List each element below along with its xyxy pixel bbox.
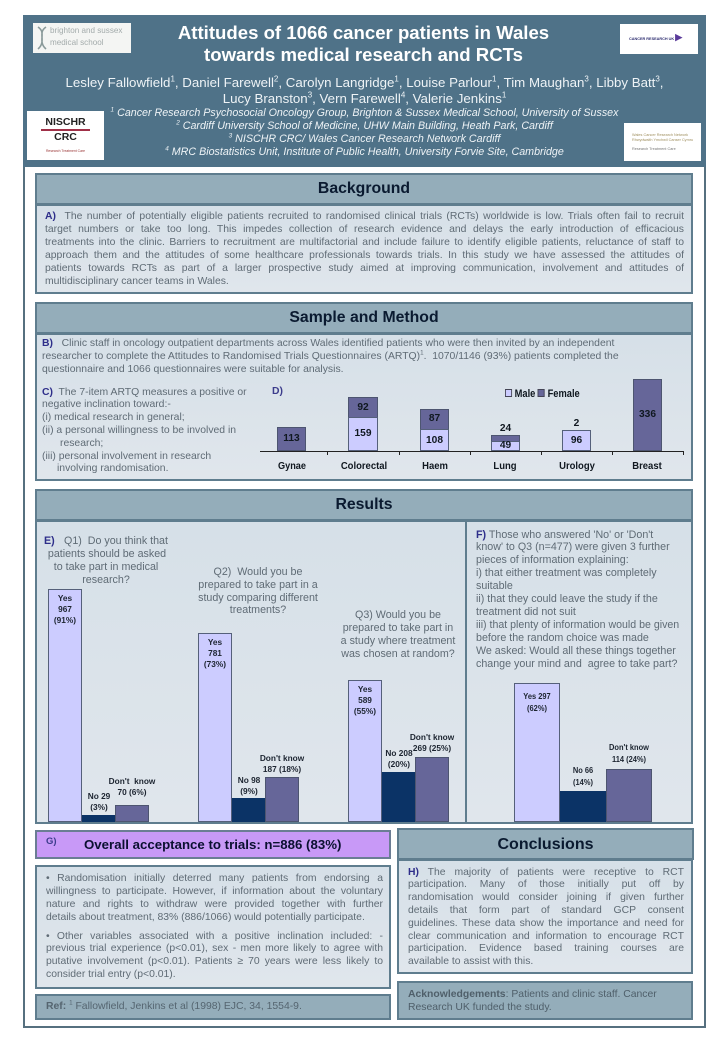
value labels: 967 bbox=[58, 604, 72, 614]
chart D: patients by cancer site: 96 bbox=[571, 435, 582, 446]
question 1: Q1) Do you think that bbox=[64, 535, 168, 547]
chart D: patients by cancer site: 24 bbox=[500, 423, 511, 434]
value labels: 589 bbox=[358, 695, 372, 705]
question 3 bbox=[341, 608, 456, 660]
chart D: patients by cancer site: 159 bbox=[354, 428, 372, 439]
label G: G) bbox=[46, 836, 57, 847]
bars: 113 bbox=[283, 433, 300, 444]
panel: acknowledgements: Acknowledgements: Patients and clinic staff. Cancer bbox=[408, 989, 657, 1000]
chart D: patients by cancer site: Haem bbox=[422, 461, 448, 472]
value labels: (62%) bbox=[527, 702, 547, 712]
text F bbox=[476, 528, 679, 670]
logo: Brighton and Sussex: medical school bbox=[50, 38, 104, 47]
text C: C) The 7-item ARTQ measures a positive or bbox=[42, 386, 247, 398]
text B: researcher to complete the Attitudes to Randomised Trials Questionnaires (ARTQ)1. 1070/1146 (93%) patients completed the bbox=[42, 349, 619, 362]
text F: know' to Q3 (n=477) were given 3 further bbox=[476, 541, 670, 553]
panel: results right bbox=[465, 520, 693, 824]
panel: results summary text: • Randomisation initially deterred many patients from endorsing a bbox=[46, 873, 383, 884]
panel: conclusions heading: Conclusions bbox=[497, 836, 594, 853]
panel: background heading bbox=[35, 173, 693, 205]
affiliations: 3 NISCHR CRC/ Wales Cancer Research Network Cardiff bbox=[229, 132, 500, 145]
question 1: E) bbox=[44, 535, 55, 547]
legend: Male Female bbox=[515, 388, 580, 400]
bars bbox=[48, 589, 82, 822]
panel: conclusions text: H) The majority of patients were receptive to RCT bbox=[408, 866, 684, 878]
question 2 bbox=[198, 566, 318, 616]
question 3: prepared to take part in bbox=[343, 622, 453, 634]
question 1: to take part in medical bbox=[54, 560, 158, 572]
question 3: a study where treatment bbox=[341, 634, 455, 646]
text F: F) Those who answered 'No' or 'Don't bbox=[476, 528, 653, 540]
panel: conclusions text: clear communication and information to encourage RCT bbox=[408, 930, 684, 942]
value labels bbox=[523, 691, 551, 712]
panel: overall acceptance heading bbox=[35, 830, 391, 859]
text F: pieces of information explaining: bbox=[476, 554, 629, 566]
value labels: (73%) bbox=[204, 659, 226, 669]
bars bbox=[198, 633, 232, 822]
panel: results summary text: willingness to participate. However, if information about the voluntary bbox=[46, 886, 383, 897]
logo: Cancer Research UK: CANCER RESEARCH UK ▶ bbox=[629, 32, 682, 42]
axis bbox=[260, 451, 683, 452]
panel: conclusions text: available to assist with this. bbox=[408, 956, 533, 967]
panel: background text bbox=[35, 204, 693, 294]
question 2: prepared to take part in a bbox=[198, 578, 318, 590]
text F: treatment did not suit bbox=[476, 606, 576, 618]
question 1 bbox=[44, 535, 168, 586]
text F: iii) that plenty of information would be given bbox=[476, 619, 679, 631]
chart D: patients by cancer site bbox=[260, 379, 684, 472]
chart E Q3: No 208 bbox=[385, 748, 413, 758]
panel: conclusions text: participation. Many of those initially put off by bbox=[408, 879, 684, 890]
authors: Lucy Branston3, Vern Farewell4, Valerie Jenkins1 bbox=[223, 91, 506, 106]
authors bbox=[66, 75, 664, 106]
affiliations: 2 Cardiff University School of Medicine, UHW Main Building, Heath Park, Cardiff bbox=[176, 119, 553, 132]
title bbox=[178, 22, 549, 65]
panel: reference: Ref: 1 Fallowfield, Jenkins et al (1998) EJC, 34, 1554-9. bbox=[46, 1000, 302, 1012]
value labels: 781 bbox=[208, 648, 222, 658]
chart D: patients by cancer site: Lung bbox=[493, 461, 517, 472]
category labels: Gynae bbox=[278, 461, 306, 472]
authors: Lesley Fallowfield1, Daniel Farewell2, Carolyn Langridge1, Louise Parlour1, Tim Maughan3, Libby Batt3, bbox=[66, 75, 664, 90]
chart E Q1: No 29 bbox=[88, 791, 110, 801]
bars bbox=[348, 680, 382, 822]
panel: background text: target numbers or take too long. This impedes collection of research evidence and delays the early introduction of efficacious bbox=[45, 224, 684, 234]
panel: results summary text bbox=[35, 865, 391, 989]
chart E Q3: Don't know bbox=[410, 732, 454, 742]
chart F: (14%) bbox=[573, 776, 593, 786]
bars bbox=[514, 683, 560, 822]
panel: results summary text: details about treatment, 83% (886/1066) would potentially participate. bbox=[46, 912, 365, 923]
chart E Q2: 187 (18%) bbox=[263, 764, 301, 774]
chart D: patients by cancer site: 2 bbox=[574, 418, 579, 429]
text F: before the random choice was made bbox=[476, 632, 649, 644]
value labels: (55%) bbox=[354, 706, 376, 716]
panel: sample and method heading: Sample and Method bbox=[289, 309, 439, 326]
logo: Wales Cancer Research Network bbox=[624, 123, 701, 161]
panel: results heading bbox=[35, 489, 693, 521]
question 2: treatments? bbox=[230, 604, 286, 616]
logo: NISCHR CRC: NISCHR bbox=[45, 116, 86, 128]
text C: (iii) personal involvement in research bbox=[42, 450, 211, 462]
text B: questionnaire and 1066 questionnaires were suitable for analysis. bbox=[42, 364, 344, 374]
panel: background text: approach them and the attitudes of some healthcare professionals towards trials. In this study we have assessed the attitudes of bbox=[45, 250, 684, 260]
text F: We asked: Would all these things together bbox=[476, 645, 676, 657]
text F: ii) that they could leave the study if the bbox=[476, 593, 658, 605]
panel: background heading: Background bbox=[318, 180, 410, 197]
panel: background text: A) The number of potentially eligible patients recruited to randomised clinical trials (RCTs) worldwide is low. Trials often fail to recruit bbox=[45, 210, 684, 222]
panel: reference bbox=[35, 994, 391, 1020]
logo: Wales Cancer Research Network: Research Treatment Care bbox=[632, 147, 676, 151]
chart E Q1: 70 (6%) bbox=[117, 787, 147, 797]
header banner bbox=[23, 15, 706, 167]
overall acceptance text: Overall acceptance to trials: n=886 (83%) bbox=[84, 837, 341, 852]
chart E Q1: Don't know bbox=[109, 776, 155, 786]
value labels bbox=[204, 637, 226, 669]
question 2: Q2) Would you be bbox=[214, 566, 302, 578]
chart E Q3: (20%) bbox=[388, 759, 410, 769]
panel: results summary text: nature and rights to withdraw were provided together with further bbox=[46, 899, 383, 910]
value labels bbox=[54, 593, 76, 625]
question 3: was chosen at random? bbox=[341, 648, 455, 660]
affiliations bbox=[110, 106, 619, 158]
chart E Q2: No 98 bbox=[238, 775, 260, 785]
chart E Q2: (9%) bbox=[240, 786, 258, 796]
panel: results summary text: consider trial entry (p<0.01). bbox=[46, 969, 176, 980]
value labels: Yes 297 bbox=[523, 691, 551, 701]
panel: conclusions text: participation. Evidence based training courses are bbox=[408, 943, 684, 954]
chart D: patients by cancer site: 92 bbox=[357, 402, 369, 413]
text C: (ii) a personal willingness to be involved in bbox=[42, 425, 236, 436]
chart E Q3: 269 (25%) bbox=[413, 743, 451, 753]
text B: B) Clinic staff in oncology outpatient departments across Wales identified patients who were then invited by an independent bbox=[42, 338, 614, 348]
logo: Brighton and Sussex bbox=[33, 23, 131, 53]
panel: conclusions text bbox=[397, 859, 693, 974]
logo: Wales Cancer Research Network: Rhwydwaith Ymchwil Canser Cymru bbox=[632, 138, 693, 142]
chart D: patients by cancer site: 87 bbox=[429, 413, 440, 424]
affiliations: 4 MRC Biostatistics Unit, Institute of Public Health, University Forvie Site, Cambridge bbox=[165, 145, 564, 158]
panel: results heading: Results bbox=[335, 496, 393, 513]
logo: NISCHR CRC: CRC bbox=[54, 131, 77, 143]
chart F: Don't know bbox=[609, 742, 649, 752]
panel: results summary text: • Other variables associated with a positive inclination included: - bbox=[46, 930, 383, 942]
value labels: Yes bbox=[208, 637, 222, 647]
text C bbox=[42, 386, 247, 474]
title: Attitudes of 1066 cancer patients in Wales bbox=[178, 22, 549, 43]
panel: background text: multidisciplinary cancer teams in Wales. bbox=[45, 276, 229, 286]
chart D: patients by cancer site: 49 bbox=[500, 440, 511, 451]
panel: background text: treatments into the clinic. Barriers to recruitment are multifactorial and include failure to identify eligible patients, reluctance of staff to bbox=[45, 236, 684, 248]
chart E Q1 bbox=[44, 535, 168, 822]
panel: conclusions text: guidelines. These data show the importance and need for bbox=[408, 918, 684, 929]
logo: Cancer Research UK bbox=[620, 24, 698, 54]
panel: results summary text: putative involvement (p<0.01). Patients ≥ 70 years were less likely to bbox=[46, 956, 383, 967]
axis ticks bbox=[327, 451, 684, 455]
chart F bbox=[514, 683, 652, 822]
logo: Wales Cancer Research Network: Wales Cancer Research Network bbox=[632, 133, 688, 137]
question 1: patients should be asked bbox=[48, 548, 166, 560]
chart F: No 66 bbox=[573, 765, 593, 775]
panel: conclusions heading bbox=[397, 828, 694, 860]
question 3: Q3) Would you be bbox=[355, 608, 441, 620]
panel: conclusions text: details that form part of standard GCP consent bbox=[408, 905, 684, 916]
text C: research; bbox=[60, 438, 103, 449]
text B bbox=[42, 338, 619, 374]
value labels: (91%) bbox=[54, 615, 76, 625]
text C: involving randomisation. bbox=[57, 463, 168, 474]
title: towards medical research and RCTs bbox=[204, 44, 523, 65]
panel: results summary text: previous trial experience (p<0.01), sex - men more likely to agree with bbox=[46, 943, 383, 954]
chart D: patients by cancer site: 108 bbox=[426, 435, 443, 446]
chart D: patients by cancer site: Colorectal bbox=[341, 461, 387, 472]
panel: sample and method body bbox=[35, 333, 693, 481]
chart D: patients by cancer site: Urology bbox=[559, 461, 595, 472]
value labels bbox=[354, 684, 376, 716]
chart E Q3 bbox=[341, 608, 456, 822]
logo: Brighton and Sussex: brighton and sussex bbox=[50, 26, 122, 35]
text F: suitable bbox=[476, 580, 513, 592]
panel: results left bbox=[35, 520, 467, 824]
value labels: Yes bbox=[58, 593, 72, 603]
panel: acknowledgements bbox=[397, 981, 693, 1020]
panel: acknowledgements: Research UK funded the study. bbox=[408, 1002, 552, 1013]
chart F: 114 (24%) bbox=[612, 754, 646, 764]
panel: background text: patients towards RCTs as part of a larger prospective study aimed at improving communication, involvement and attitudes of bbox=[45, 262, 684, 274]
chart E Q1: (3%) bbox=[90, 802, 108, 812]
question 1: research? bbox=[82, 574, 130, 586]
panel: sample and method heading bbox=[35, 302, 693, 334]
logo: NISCHR CRC bbox=[27, 111, 104, 160]
chart D: patients by cancer site: Breast bbox=[632, 461, 662, 472]
chart D: patients by cancer site: 336 bbox=[639, 409, 656, 420]
bars bbox=[277, 427, 306, 451]
affiliations: 1 Cancer Research Psychosocial Oncology Group, Brighton & Sussex Medical School, University of Sussex bbox=[111, 106, 618, 119]
text C: (i) medical research in general; bbox=[42, 412, 185, 423]
value labels: Yes bbox=[358, 684, 372, 694]
text C: negative inclination toward:- bbox=[42, 399, 171, 410]
label D: D) bbox=[272, 386, 283, 397]
panel: conclusions text: randomisation would consider joining if given further bbox=[408, 892, 684, 903]
chart E Q2: Don't know bbox=[260, 753, 304, 763]
text F: change your mind and agree to take part? bbox=[476, 658, 677, 670]
logo: NISCHR CRC: Research Treatment Care bbox=[46, 149, 85, 153]
text F: i) that either treatment was completely bbox=[476, 567, 657, 579]
question 2: study comparing different bbox=[198, 592, 318, 604]
chart E Q2 bbox=[198, 566, 318, 822]
